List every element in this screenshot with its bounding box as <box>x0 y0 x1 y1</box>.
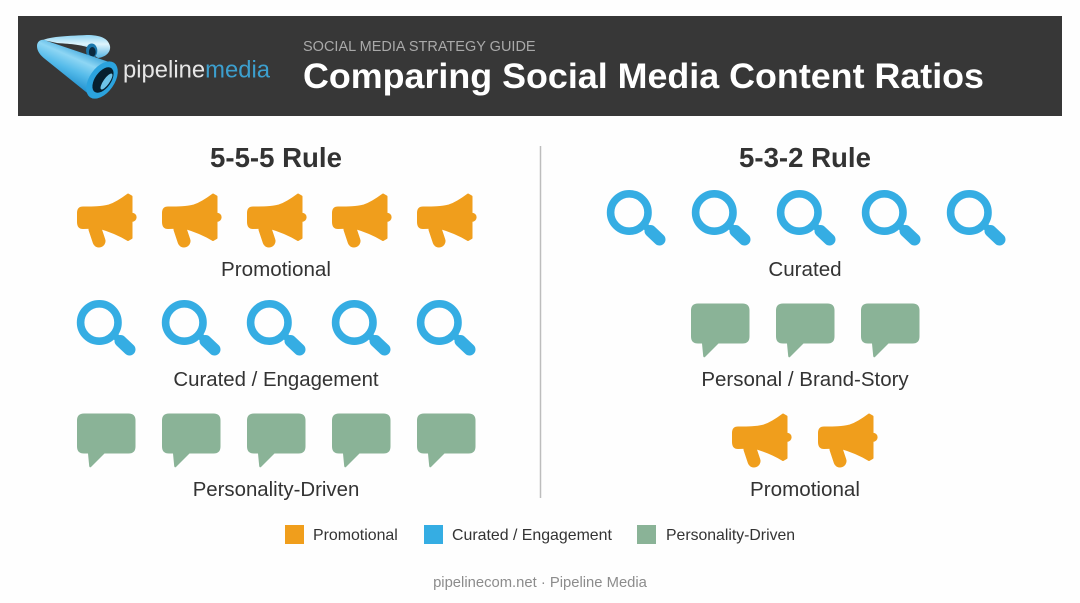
panel: 5-5-5 rule <box>77 142 477 501</box>
heading: 5-5-5 Rule: 5-5-5 Rule <box>210 142 342 173</box>
legend item: curated / engagement: Curated / Engagement <box>452 527 612 544</box>
label: curated: Curated <box>768 258 842 281</box>
legend item: promotional: Promotional <box>313 527 398 544</box>
pipeline media logo <box>37 35 270 104</box>
row: personality icons <box>77 414 476 467</box>
legend item: promotional <box>285 525 398 544</box>
header banner <box>18 16 1062 116</box>
logo wordmark: pipelinemedia <box>123 56 270 84</box>
heading: 5-3-2 Rule: 5-3-2 Rule <box>739 142 871 173</box>
legend item: personality-driven: Personality-Driven <box>666 527 795 544</box>
row: curated icons <box>611 194 1000 240</box>
footer credit: pipelinecom.net · Pipeline Media <box>433 575 648 591</box>
panel: 5-3-2 rule <box>611 142 1000 501</box>
label: promotional: Promotional <box>750 478 860 501</box>
label: promotional: Promotional <box>221 258 331 281</box>
row: promotional icons <box>733 414 878 461</box>
header eyebrow: SOCIAL MEDIA STRATEGY GUIDE <box>303 39 536 55</box>
legend <box>285 525 795 544</box>
label: personal / brand-story: Personal / Brand-Story <box>701 368 909 391</box>
row: promotional icons <box>78 194 477 241</box>
label: curated / engagement: Curated / Engagement <box>173 369 379 391</box>
icon: pipe logo <box>37 35 124 104</box>
label: personality-driven: Personality-Driven <box>193 479 359 501</box>
row: personal icons <box>691 304 920 357</box>
row: curated icons <box>81 304 469 350</box>
main title: Comparing Social Media Content Ratios <box>303 57 984 96</box>
